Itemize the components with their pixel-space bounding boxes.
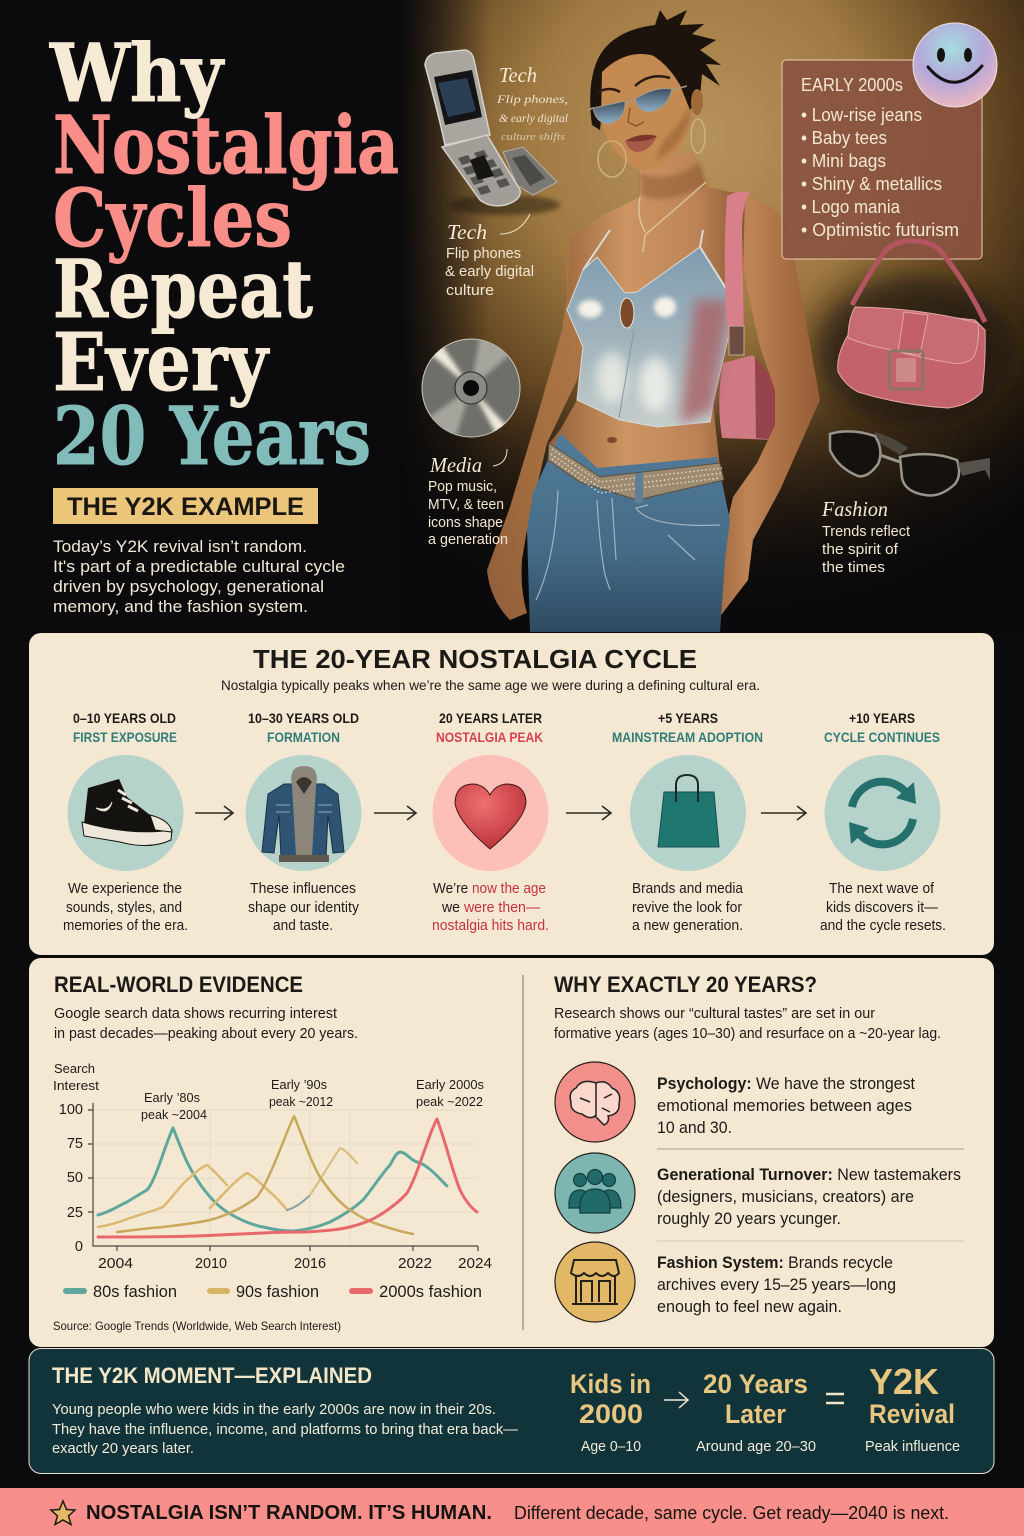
series: faded gold peak — [310, 1148, 357, 1195]
title: Repeat — [53, 242, 313, 336]
panel: the 20-year nostalgia cycle — [29, 633, 994, 955]
step 3: nostalgia peak: We’re now the age — [433, 881, 546, 897]
eyebrows — [598, 76, 670, 92]
line chart: search interest: 25 — [67, 1205, 83, 1221]
icon: denim jacket with hoodie — [262, 766, 344, 862]
step 2: formation: shape our identity — [248, 900, 360, 916]
line chart: search interest: 2022 — [398, 1256, 432, 1272]
evidence text: in past decades—peaking about every 20 years. — [54, 1026, 358, 1042]
chart legend: 80s fashion — [93, 1283, 177, 1301]
shoulder bag body — [719, 355, 777, 440]
annotation: tech: culture — [446, 282, 494, 299]
jeans — [527, 433, 750, 632]
step 5: cycle continues: CYCLE CONTINUES — [824, 729, 940, 745]
icon: brain — [570, 1081, 620, 1125]
panel: early 2000s list: • Low-rise jeans — [801, 105, 922, 125]
moment text — [52, 1402, 519, 1457]
step 2: formation: and taste. — [273, 918, 333, 934]
peak labels: Early ’80s — [144, 1090, 200, 1105]
head — [601, 54, 690, 170]
icon: shopping bag — [658, 775, 719, 847]
footer banner — [0, 1488, 1024, 1536]
arrow — [664, 1392, 688, 1408]
annotation: fashion: Trends reflect — [822, 523, 911, 540]
icon: sneaker — [82, 779, 172, 846]
icon: heart — [455, 784, 526, 849]
step 1: first exposure — [63, 710, 188, 934]
why heading: WHY EXACTLY 20 YEARS? — [554, 972, 817, 997]
panel: early 2000s list: EARLY 2000s — [801, 75, 903, 95]
equation: 20 years later: 20 Years — [703, 1369, 808, 1399]
equation: Y2K revival — [865, 1361, 960, 1455]
line chart: search interest: 0 — [75, 1239, 83, 1255]
equation: Y2K revival: Revival — [869, 1399, 955, 1429]
panel: evidence and why 20 years — [29, 958, 994, 1347]
step 5: cycle continues: and the cycle resets. — [820, 918, 946, 934]
evidence heading: REAL-WORLD EVIDENCE — [54, 972, 303, 997]
equals sign — [826, 1394, 844, 1403]
reason: psychology: emotional memories between ages — [657, 1096, 912, 1115]
equation: 20 years later: Later — [725, 1399, 786, 1429]
step 5: cycle continues — [820, 710, 946, 934]
step 1: first exposure: We experience the — [68, 881, 182, 897]
line chart: search interest — [53, 1061, 492, 1272]
hoop earrings — [598, 119, 705, 177]
footer banner: Different decade, same cycle. Get ready—2040 is next. — [514, 1503, 949, 1523]
line chart: search interest: 75 — [67, 1136, 83, 1152]
reason: fashion system: Fashion System: Brands recycle — [657, 1253, 893, 1272]
step 3: nostalgia peak: 20 YEARS LATER — [439, 710, 542, 726]
arrow — [374, 806, 416, 820]
annotation: tech (upper): Tech — [499, 63, 537, 87]
necklace — [639, 182, 706, 252]
annotation: tech (upper) — [496, 63, 569, 143]
annotation: fashion: the times — [822, 559, 885, 576]
silver top — [567, 230, 730, 427]
equation: kids in 2000 — [570, 1369, 651, 1455]
arrow — [566, 806, 611, 820]
line chart: search interest: 2016 — [294, 1256, 326, 1272]
title: Cycles — [53, 171, 292, 265]
moment text: exactly 20 years later. — [52, 1441, 194, 1457]
ear — [691, 89, 703, 115]
right arm — [690, 194, 820, 627]
equation: Y2K revival: Peak influence — [865, 1439, 960, 1455]
step 2: formation: 10–30 YEARS OLD — [248, 710, 359, 726]
panel: the Y2K moment explained — [29, 1348, 994, 1474]
panel: early 2000s list: • Mini bags — [801, 151, 886, 171]
annotation: media: MTV, & teen — [428, 496, 504, 513]
why text: formative years (ages 10–30) and resurface on a ~20-year lag. — [554, 1026, 941, 1042]
reason: psychology: Psychology: We have the strongest — [657, 1074, 915, 1093]
reason: generational turnover: roughly 20 years ycunger. — [657, 1209, 841, 1228]
annotation: fashion: Fashion — [821, 497, 888, 521]
reason: fashion system — [555, 1242, 896, 1322]
step 5: cycle continues: kids discovers it— — [826, 900, 938, 916]
annotation: fashion: the spirit of — [822, 541, 899, 558]
peak labels: Early ’90s — [271, 1077, 327, 1092]
title: Why — [49, 26, 225, 120]
equation: kids in 2000: Kids in — [570, 1369, 651, 1399]
lips — [625, 135, 657, 152]
evidence text: Google search data shows recurring interest — [54, 1006, 337, 1022]
annotation: fashion — [821, 497, 911, 576]
jeans seams — [536, 490, 720, 600]
icon: flip phone — [425, 50, 560, 215]
why text — [554, 1006, 941, 1042]
annotation: tech: Tech — [447, 220, 487, 244]
line chart: search interest: 50 — [67, 1170, 83, 1186]
icon: star — [51, 1501, 75, 1524]
chart source: Source: Google Trends (Worldwide, Web Search Interest) — [53, 1319, 341, 1333]
line chart: search interest: 100 — [59, 1102, 83, 1118]
equation: Y2K revival: Y2K — [869, 1361, 939, 1402]
sunglasses — [588, 86, 687, 124]
shoulder bag strap — [725, 192, 750, 340]
hero photo backdrop — [400, 0, 1024, 632]
intro text: driven by psychology, generational — [53, 577, 324, 596]
left arm — [487, 232, 590, 620]
neck shadow — [640, 162, 706, 199]
panel: early 2000s list: • Logo mania — [801, 197, 901, 217]
panel: early 2000s list: • Shiny & metallics — [801, 174, 942, 194]
chart legend — [63, 1283, 482, 1301]
chart legend: 2000s fashion — [379, 1283, 482, 1301]
line chart: search interest: Search — [54, 1061, 95, 1076]
footer banner: NOSTALGIA ISN’T RANDOM. IT’S HUMAN. — [86, 1502, 492, 1524]
moment heading: THE Y2K MOMENT—EXPLAINED — [52, 1363, 372, 1388]
chart legend: 90s fashion — [236, 1283, 319, 1301]
step 5: cycle continues: +10 YEARS — [849, 710, 915, 726]
step 4: mainstream adoption: a new generation. — [632, 918, 743, 934]
series: 2000s fashion — [98, 1119, 477, 1237]
title: Nostalgia — [53, 98, 399, 192]
step 1: first exposure: sounds, styles, and — [66, 900, 182, 916]
step 4: mainstream adoption: MAINSTREAM ADOPTION — [612, 729, 763, 745]
line chart: search interest: 2024 — [458, 1256, 492, 1272]
reason: fashion system: enough to feel new again. — [657, 1297, 842, 1316]
cycle subheading: Nostalgia typically peaks when we’re the same age we were during a defining cultural era. — [221, 677, 760, 693]
line chart: search interest: 2010 — [195, 1256, 227, 1272]
series: 90s fashion wave — [98, 1165, 287, 1227]
icon: sunglasses — [830, 431, 990, 496]
intro text: memory, and the fashion system. — [53, 597, 308, 616]
arrow — [195, 806, 233, 820]
reason: generational turnover: Generational Turnover: New tastemakers — [657, 1165, 961, 1184]
step 4: mainstream adoption: Brands and media — [632, 881, 744, 897]
title: 20 Years — [53, 389, 371, 483]
equation: 20 years later — [696, 1369, 816, 1455]
reason: generational turnover: (designers, musicians, creators) are — [657, 1187, 914, 1206]
equation: kids in 2000: 2000 — [579, 1399, 643, 1429]
annotation: media: Pop music, — [428, 478, 497, 495]
badge: the Y2K example — [53, 488, 318, 524]
annotation: tech (upper): & early digital — [499, 111, 569, 125]
icon: pink handbag — [838, 241, 985, 408]
step 4: mainstream adoption: revive the look for — [632, 900, 742, 916]
navel — [607, 437, 617, 443]
line chart: search interest: Interest — [53, 1078, 99, 1093]
moment text: They have the influence, income, and platforms to bring that era back— — [52, 1422, 519, 1438]
annotation: tech — [445, 214, 534, 299]
equation: 20 years later: Around age 20–30 — [696, 1439, 816, 1455]
line chart: search interest: 2004 — [98, 1256, 133, 1272]
reason: generational turnover — [555, 1153, 961, 1233]
reason: psychology — [555, 1062, 915, 1142]
step 1: first exposure: FIRST EXPOSURE — [73, 729, 177, 745]
icon: cycle arrows — [849, 782, 916, 844]
panel: early 2000s list: • Optimistic futurism — [801, 220, 959, 240]
annotation: tech: Flip phones — [446, 245, 521, 262]
step 4: mainstream adoption — [612, 710, 763, 934]
step 3: nostalgia peak — [432, 710, 549, 934]
annotation: tech (upper): culture shifts — [501, 131, 565, 143]
peak labels: peak ~2012 — [269, 1094, 333, 1109]
moment text: Young people who were kids in the early 2000s are now in their 20s. — [52, 1402, 496, 1418]
annotation: tech (upper): Flip phones, — [496, 92, 568, 106]
step 4: mainstream adoption: +5 YEARS — [658, 710, 718, 726]
step 3: nostalgia peak: we were then— — [441, 900, 540, 916]
icon: people — [569, 1170, 621, 1213]
intro text — [53, 537, 345, 616]
badge: the Y2K example: THE Y2K EXAMPLE — [67, 493, 304, 521]
panel: early 2000s list: • Baby tees — [801, 128, 887, 148]
step 1: first exposure: memories of the era. — [63, 918, 188, 934]
step 3: nostalgia peak: nostalgia hits hard. — [432, 918, 549, 934]
step 2: formation: FORMATION — [267, 729, 340, 745]
series: faded trend — [287, 1195, 310, 1210]
intro text: Today’s Y2K revival isn’t random. — [53, 537, 307, 556]
nose shadow — [628, 108, 644, 126]
series: 80s fashion — [98, 1128, 447, 1231]
peak labels: peak ~2004 — [141, 1107, 207, 1122]
icon: smiley — [913, 23, 997, 107]
studded belt — [548, 443, 724, 503]
icon: storefront — [571, 1260, 619, 1304]
panel: early 2000s list — [782, 60, 982, 259]
illustration: woman in Y2K outfit — [487, 10, 820, 632]
annotation: media: Media — [429, 453, 482, 477]
step 1: first exposure: 0–10 YEARS OLD — [73, 710, 176, 726]
annotation: media — [428, 449, 508, 548]
cycle heading: THE 20-YEAR NOSTALGIA CYCLE — [253, 644, 697, 674]
series: 90s fashion main — [117, 1116, 413, 1234]
step 5: cycle continues: The next wave of — [829, 881, 935, 897]
peak labels: Early 2000s — [416, 1077, 484, 1092]
equation: kids in 2000: Age 0–10 — [581, 1439, 641, 1455]
peak labels — [141, 1077, 484, 1122]
title — [49, 26, 399, 483]
reason: psychology: 10 and 30. — [657, 1118, 732, 1137]
evidence text — [54, 1006, 358, 1042]
peak labels: peak ~2022 — [416, 1094, 483, 1109]
annotation: media: a generation — [428, 531, 508, 548]
intro text: It's part of a predictable cultural cycle — [53, 557, 345, 576]
step 2: formation: These influences — [250, 881, 356, 897]
step 3: nostalgia peak: NOSTALGIA PEAK — [436, 729, 543, 745]
icon: compact disc — [422, 338, 520, 438]
step 2: formation — [246, 710, 362, 934]
title: Every — [53, 315, 270, 409]
annotation: media: icons shape — [428, 514, 503, 531]
reason: fashion system: archives every 15–25 years—long — [657, 1275, 896, 1294]
neck and torso — [548, 150, 745, 482]
why text: Research shows our “cultural tastes” are set in our — [554, 1006, 875, 1022]
annotation: tech: & early digital — [445, 263, 534, 280]
arrow — [761, 806, 806, 820]
hair bun — [590, 10, 721, 130]
